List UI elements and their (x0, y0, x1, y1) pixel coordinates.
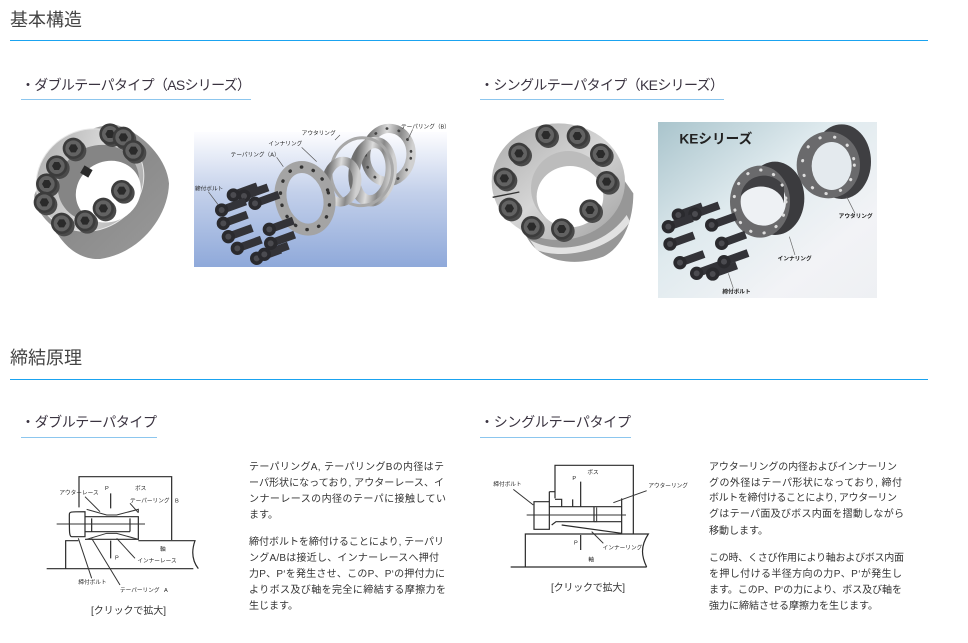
part labels: テーパリング（B） (401, 122, 450, 130)
diagram labels (493, 468, 688, 564)
text block: double taper explanation (249, 460, 446, 612)
diagram labels: 締付ボルト (78, 578, 107, 586)
part: inner ring (324, 159, 360, 204)
text block: double taper explanation: ます。 (249, 509, 278, 521)
part: outer ring (327, 134, 397, 210)
heading rule (10, 379, 928, 380)
text block: double taper explanation: ーパ形状になっており, アウターレース、イ (249, 476, 444, 489)
diagram: single taper cross section (493, 465, 688, 567)
part: outer ring (797, 124, 871, 199)
diagram labels: テーパーリング (130, 496, 170, 504)
diagram labels (59, 484, 179, 594)
diagram labels: P (115, 555, 119, 561)
part labels: アウタリング (302, 129, 336, 137)
text block: double taper explanation: ングA/Bは接近し、インナーレースへ押付 (249, 551, 439, 564)
text block: single taper explanation: 強力に締結させる摩擦力を生じます。 (709, 599, 878, 612)
diagram: double taper cross section (47, 477, 198, 594)
part: clamping bolts (662, 205, 748, 281)
text block: single taper explanation (709, 460, 904, 612)
caption: click to enlarge: [クリックで拡大] (91, 604, 166, 617)
part labels: 締付ボルト (722, 287, 751, 295)
panel title: KEシリーズ (679, 131, 753, 147)
diagram labels: P (572, 476, 576, 482)
photo: AS series locking assembly (17, 109, 169, 259)
diagram labels: テーパーリング (120, 586, 160, 594)
subheading: double taper AS series: ・ダブルテーパタイプ（ASシリーズ） (21, 77, 251, 93)
diagram labels: アウターリング (648, 481, 688, 489)
diagram labels: 締付ボルト (493, 480, 522, 488)
text block: double taper explanation: 力P、P‘を発生させ、このP、P‘の押付力に (249, 567, 445, 580)
text block: single taper explanation: グの外径はテーパ形状になっており, 締付 (709, 476, 902, 489)
photo panel: KE series exploded view (658, 122, 877, 298)
part labels: テーパリング（A） (231, 151, 280, 159)
heading: 締結原理: 締結原理 (10, 348, 82, 368)
diagram labels: P (574, 541, 578, 547)
diagram labels: ボス (135, 484, 147, 492)
diagram labels: A (164, 588, 168, 594)
text block: single taper explanation: ボルトを締付けることにより, アウターリン (709, 491, 897, 504)
subheading: double taper type: ・ダブルテーパタイプ (21, 414, 157, 430)
photo: KE series locking assembly (492, 123, 633, 262)
part: clamping bolts (215, 186, 295, 265)
subheading: single taper type: ・シングルテーパタイプ (480, 414, 631, 430)
text block: double taper explanation: 締付ボルトを締付けることにより, テーパリ (249, 535, 444, 548)
caption: click to enlarge: [クリックで拡大] (551, 581, 625, 594)
part labels: アウタリング (839, 212, 873, 220)
text block: single taper explanation: グはテーパ面及びボス内面を摺動しながら (709, 507, 904, 520)
subheading: single taper KE series: ・シングルテーパタイプ（KEシリーズ） (480, 77, 724, 93)
diagram labels: 軸 (160, 545, 166, 553)
text block: double taper explanation: テーパリングA, テーパリングBの内径はテ (249, 460, 444, 473)
text block: single taper explanation: この時、くさび作用により軸およびボス内面 (709, 551, 904, 564)
text block: single taper explanation: 移動します。 (709, 524, 768, 537)
part labels: インナリング (268, 140, 303, 148)
diagram labels: B (175, 499, 179, 505)
heading: 基本構造: 基本構造 (10, 10, 82, 30)
diagram labels: インナーリング (603, 543, 643, 551)
diagram labels: インナーレース (137, 557, 177, 564)
heading rule (10, 40, 928, 41)
diagram labels: P (105, 486, 109, 492)
text block: double taper explanation: よりボス及び軸を完全に締結する摩擦力を (249, 583, 446, 596)
part: inner ring (730, 162, 804, 238)
part: taper ring A (274, 162, 336, 235)
part labels: 締付ボルト (195, 185, 223, 193)
text block: single taper explanation: ます。このP、P‘の力により、ボス及び軸を (709, 583, 902, 596)
text block: single taper explanation: を押し付ける半径方向の力P、P‘が発生し (709, 567, 902, 580)
diagram labels: ボス (587, 468, 599, 476)
text block: double taper explanation: ンナーレースの内径のテーパに接触してい (249, 492, 446, 505)
photo panel: AS series exploded view (194, 122, 450, 267)
diagram labels: 軸 (588, 556, 594, 564)
part: taper ring B (362, 125, 414, 185)
diagram labels: アウターレース (59, 488, 99, 496)
text block: double taper explanation: 生じます。 (249, 599, 298, 612)
part labels: インナリング (778, 255, 812, 263)
text block: single taper explanation: アウターリングの内径およびインナーリン (709, 460, 897, 473)
part labels (195, 122, 450, 205)
subheading: double taper type (21, 414, 157, 438)
part labels (722, 197, 873, 295)
